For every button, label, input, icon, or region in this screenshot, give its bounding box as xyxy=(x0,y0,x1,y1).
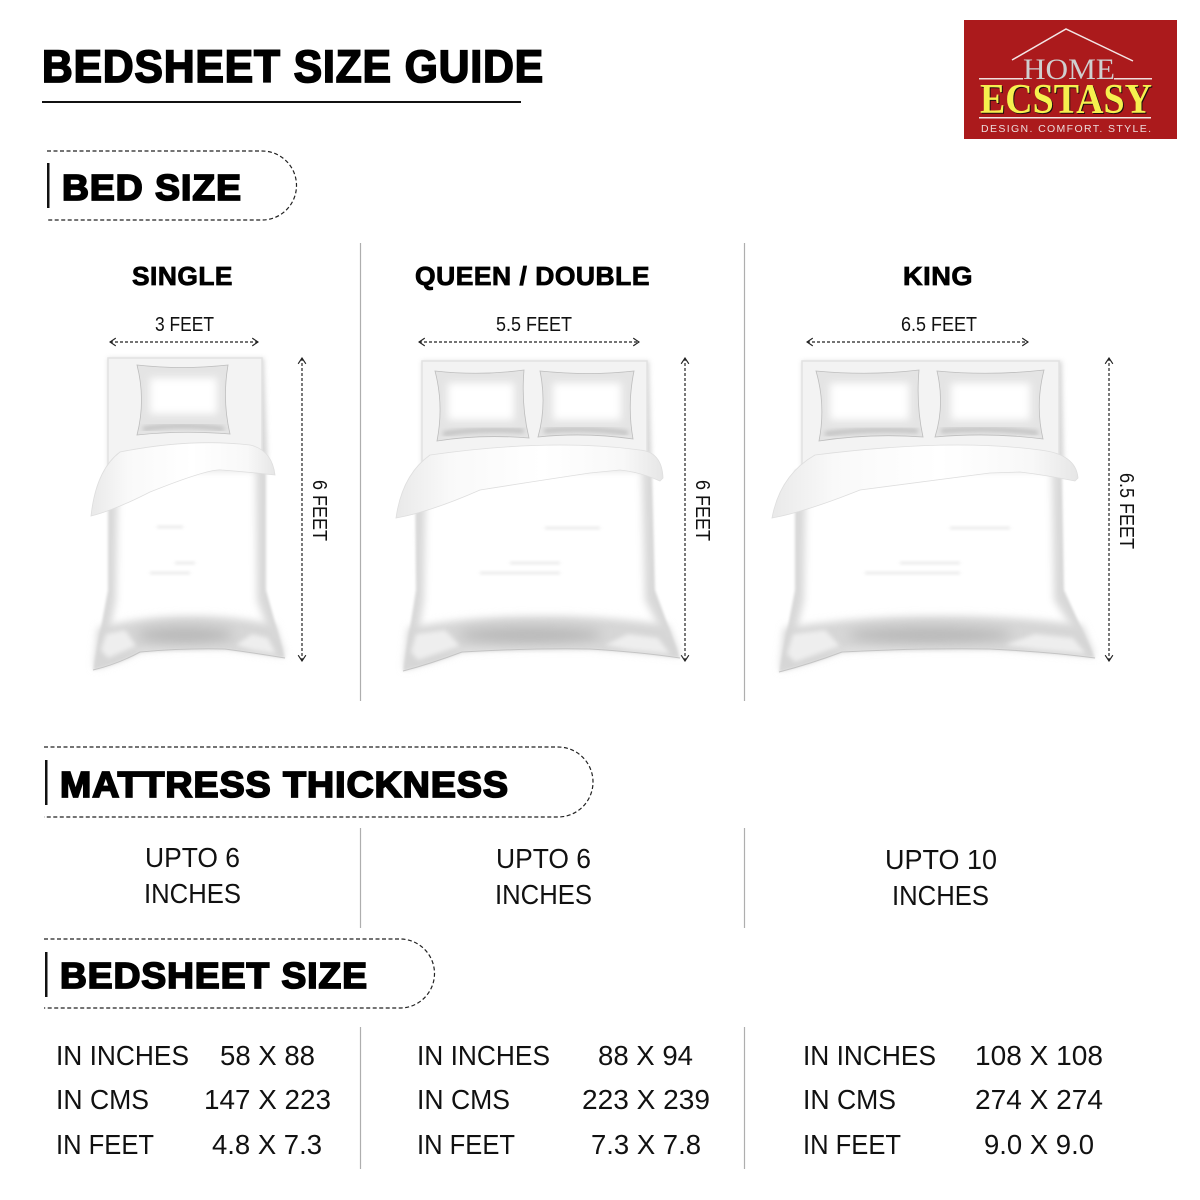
bedsheet table: single xyxy=(56,1040,331,1160)
illustration: queen bed xyxy=(396,361,680,671)
logo: Home Ecstasy xyxy=(964,20,1177,139)
logo: Home Ecstasy: ECSTASY xyxy=(980,77,1152,123)
heading: king: KING xyxy=(903,261,973,291)
bedsheet table: single: IN CMS xyxy=(56,1084,149,1115)
bedsheet table: single: 58 X 88 xyxy=(220,1040,315,1071)
section heading: bed size xyxy=(47,151,296,220)
mattress thickness: queen xyxy=(495,843,592,910)
bedsheet table: king: 274 X 274 xyxy=(975,1084,1103,1115)
panel: single bed xyxy=(91,261,330,670)
bedsheet table: king: IN CMS xyxy=(803,1084,896,1115)
section heading: bed size: BED SIZE xyxy=(62,167,242,208)
illustration: single bed xyxy=(91,358,285,670)
bedsheet table: king xyxy=(803,1040,1103,1160)
bedsheet table: single: 147 X 223 xyxy=(204,1084,331,1115)
bedsheet table: queen: 223 X 239 xyxy=(582,1084,710,1115)
heading: single: SINGLE xyxy=(132,261,233,291)
mattress thickness: queen: INCHES xyxy=(495,879,592,910)
mattress thickness: queen: UPTO 6 xyxy=(496,843,591,874)
illustration: king bed xyxy=(772,361,1095,672)
mattress thickness: single: INCHES xyxy=(144,878,241,909)
bedsheet table: queen: IN INCHES xyxy=(417,1040,550,1071)
mattress thickness: single: UPTO 6 xyxy=(145,842,240,873)
mattress thickness: king: INCHES xyxy=(892,880,989,911)
bedsheet table: king: 9.0 X 9.0 xyxy=(984,1129,1094,1160)
height label: 6 feet: 6 FEET xyxy=(691,480,713,541)
bedsheet table: king: IN INCHES xyxy=(803,1040,936,1071)
bedsheet table: queen: IN CMS xyxy=(417,1084,510,1115)
mattress thickness: single xyxy=(144,842,241,909)
width label: 5.5 feet: 5.5 FEET xyxy=(496,314,572,336)
section heading: mattress thickness xyxy=(44,747,593,817)
bedsheet table: queen xyxy=(417,1040,710,1160)
height label: 6 feet: 6 FEET xyxy=(308,480,330,541)
height label: 6.5 feet: 6.5 FEET xyxy=(1115,473,1137,549)
bedsheet table: single: IN INCHES xyxy=(56,1040,189,1071)
dividers xyxy=(360,243,744,1169)
logo: Home Ecstasy: HOME xyxy=(1023,53,1115,86)
bedsheet table: king: IN FEET xyxy=(803,1129,901,1160)
section heading: mattress thickness: MATTRESS THICKNESS xyxy=(60,764,509,805)
bedsheet table: queen: IN FEET xyxy=(417,1129,515,1160)
title: BEDSHEET SIZE GUIDE xyxy=(42,41,544,92)
panel: queen bed xyxy=(396,261,713,671)
bedsheet table: king: 108 X 108 xyxy=(975,1040,1103,1071)
width label: 6.5 feet: 6.5 FEET xyxy=(901,314,977,336)
bedsheet table: single: IN FEET xyxy=(56,1129,154,1160)
logo: Home Ecstasy: ECSTASY xyxy=(981,78,1153,124)
bedsheet table: queen: 88 X 94 xyxy=(598,1040,693,1071)
heading: queen / double: QUEEN / DOUBLE xyxy=(415,261,650,291)
mattress thickness: king xyxy=(885,844,997,911)
section heading: bedsheet size xyxy=(44,939,434,1008)
bedsheet table: single: 4.8 X 7.3 xyxy=(212,1129,322,1160)
bedsheet table: queen: 7.3 X 7.8 xyxy=(591,1129,701,1160)
logo: Home Ecstasy: DESIGN. COMFORT. STYLE. xyxy=(981,123,1151,135)
section heading: bedsheet size: BEDSHEET SIZE xyxy=(60,955,368,996)
mattress thickness: king: UPTO 10 xyxy=(885,844,997,875)
width label: 3 feet: 3 FEET xyxy=(155,314,214,336)
panel: king bed xyxy=(772,261,1137,672)
